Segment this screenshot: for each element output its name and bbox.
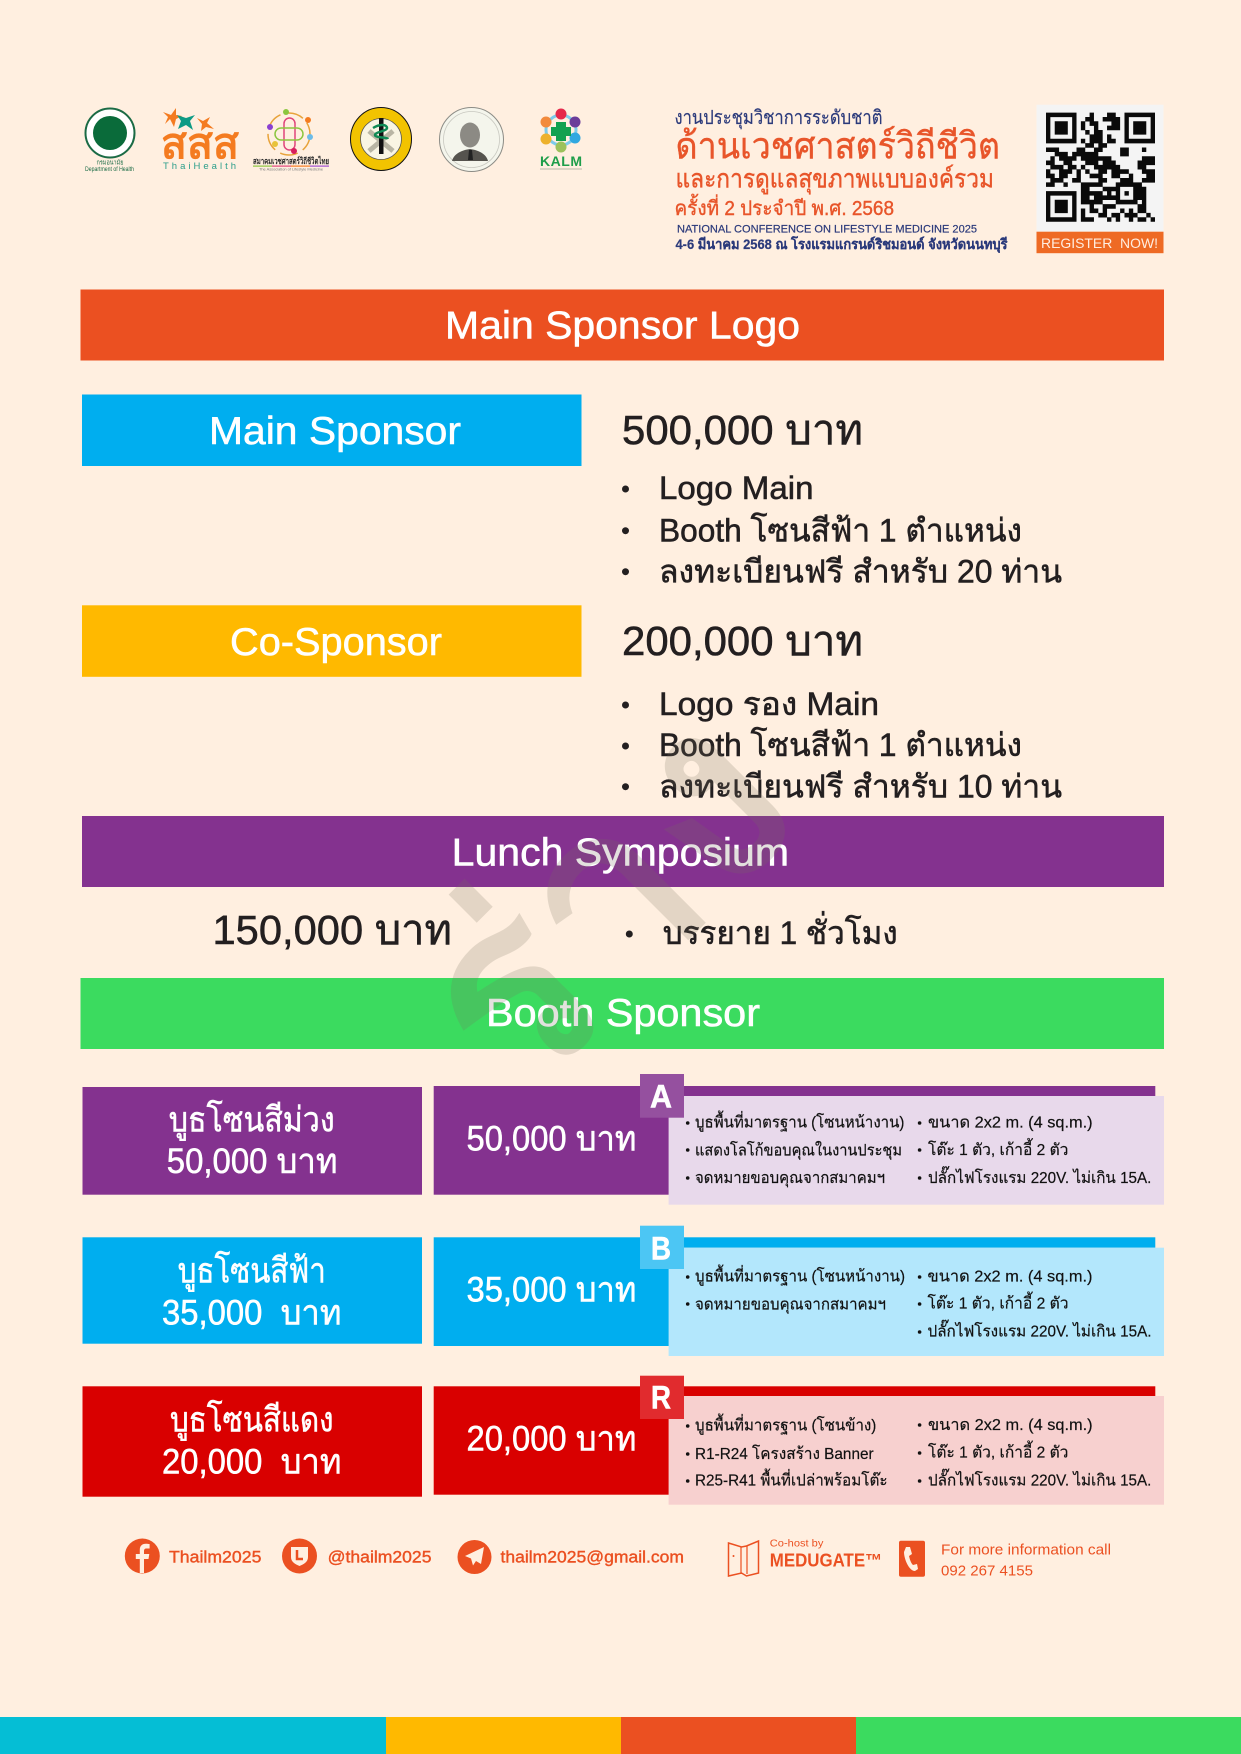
conference title block: NATIONAL CONFERENCE ON LIFESTYLE MEDICINE 2025 (677, 224, 977, 236)
zone label: 50,000 บาท (167, 1142, 338, 1181)
benefits list: ลงทะเบียนฟรี สำหรับ 20 ท่าน (659, 554, 1062, 590)
footer: Medugate co-host: Co-host by (770, 1538, 824, 1550)
footer: phone information: 092 267 4155 (941, 1563, 1033, 1580)
bottom colour strip (0, 1717, 1241, 1754)
logo: portrait medal (440, 108, 504, 172)
panel: Lunch Symposium (82, 816, 1164, 953)
logo: association of lifestyle medicine (253, 109, 329, 172)
booth row: purple zone A (82, 1074, 1164, 1205)
price: 200,000 บาท (622, 618, 863, 664)
logo: association of lifestyle medicine: The Association of Lifestyle Medicine (259, 166, 324, 172)
panel: Main Sponsor (82, 394, 1062, 590)
heading bar: Lunch Symposium: Lunch Symposium (452, 832, 789, 875)
heading bar: Booth Sponsor (80, 978, 1164, 1049)
logo: KALM (540, 108, 582, 170)
QR code with register button (1036, 105, 1164, 253)
badge B (640, 1226, 684, 1269)
conference title block (674, 107, 1008, 253)
badge A: A (650, 1079, 672, 1115)
detail panel (669, 1396, 1164, 1505)
price: 150,000 บาท (212, 907, 452, 953)
heading bar: Lunch Symposium (82, 816, 1164, 887)
label: Co-Sponsor: Co-Sponsor (230, 621, 442, 664)
footer: Facebook contact: Thailm2025 (169, 1548, 261, 1567)
zone label (82, 1386, 422, 1497)
detail panel (669, 1248, 1164, 1356)
benefits list: Booth โซนสีฟ้า 1 ตำแหน่ง (659, 513, 1022, 549)
footer: email contact: thailm2025@gmail.com (500, 1548, 684, 1567)
footer: Medugate co-host (728, 1538, 882, 1576)
conference title block: และการดูแลสุขภาพแบบองค์รวม (676, 163, 994, 194)
heading bar: Main Sponsor Logo: Main Sponsor Logo (445, 305, 800, 348)
detail panel: ขนาด 2x2 m. (4 sq.m.) (928, 1115, 1093, 1132)
footer: LINE contact: @thailm2025 (328, 1548, 432, 1567)
detail panel: แสดงโลโก้ขอบคุณในงานประชุม (695, 1140, 902, 1160)
top accent (668, 1086, 1155, 1096)
detail panel: ปลั๊กไฟโรงแรม 220V. ไม่เกิน 15A. (928, 1320, 1152, 1341)
logo: department of health: Department of Health (85, 166, 134, 173)
logo: ThaiHealth: สสส (161, 120, 239, 167)
zone label: บูธโซนสีฟ้า (178, 1251, 326, 1292)
panel: Co-Sponsor (82, 605, 1062, 804)
label: Main Sponsor (82, 394, 582, 466)
watermark: ร่าง (359, 655, 845, 1141)
zone label (82, 1237, 422, 1344)
zone label: 20,000 บาท (162, 1442, 342, 1481)
detail panel: ปลั๊กไฟโรงแรม 220V. ไม่เกิน 15A. (928, 1166, 1151, 1187)
benefits list: ลงทะเบียนฟรี สำหรับ 10 ท่าน (659, 768, 1062, 804)
footer: phone information (899, 1541, 1111, 1580)
register now button: REGISTER NOW! (1041, 235, 1158, 251)
top accent (668, 1386, 1155, 1396)
benefits list (622, 470, 1062, 590)
detail panel: ขนาด 2x2 m. (4 sq.m.) (928, 1417, 1093, 1434)
detail panel: โต๊ะ 1 ตัว, เก้าอี้ 2 ตัว (928, 1292, 1068, 1313)
conference title block: งานประชุมวิชาการระดับชาติ (674, 107, 882, 130)
detail panel: ขนาด 2x2 m. (4 sq.m.) (928, 1269, 1092, 1286)
footer: email contact (458, 1540, 684, 1574)
logo: yellow seal (350, 108, 412, 170)
logo: association of lifestyle medicine: สมาคมเวชศาสตร์วิถีชีวิตไทย (253, 155, 329, 166)
zone label: 35,000 บาท (162, 1293, 342, 1332)
logo: KALM: KALM (540, 153, 582, 169)
badge R: R (651, 1379, 671, 1415)
badge A (640, 1074, 684, 1118)
footer: Facebook contact (125, 1538, 261, 1574)
footer: LINE contact (282, 1538, 432, 1574)
detail panel: จดหมายขอบคุณจากสมาคมฯ (695, 1296, 886, 1314)
label: Main Sponsor: Main Sponsor (209, 410, 461, 453)
zone label: บูธโซนสีม่วง (169, 1100, 335, 1141)
detail panel: บูธพื้นที่มาตรฐาน (โซนข้าง) (695, 1414, 876, 1436)
benefits list: Booth โซนสีฟ้า 1 ตำแหน่ง (659, 727, 1022, 763)
heading bar: Booth Sponsor: Booth Sponsor (486, 992, 760, 1035)
badge B: B (651, 1230, 671, 1266)
zone label: บูธโซนสีแดง (170, 1400, 334, 1441)
price tab: 20,000 บาท (466, 1420, 636, 1459)
conference title block: ครั้งที่ 2 ประจำปี พ.ศ. 2568 (674, 194, 894, 220)
benefits list (622, 686, 1062, 804)
footer: Medugate co-host: MEDUGATE™ (770, 1551, 882, 1571)
price tab: 35,000 บาท (466, 1271, 636, 1310)
detail panel: บูธพื้นที่มาตรฐาน (โซนหน้างาน) (695, 1265, 905, 1287)
detail panel: R25-R41 พื้นที่เปล่าพร้อมโต๊ะ (695, 1469, 888, 1490)
conference title block: ด้านเวชศาสตร์วิถีชีวิต (676, 125, 1000, 166)
detail panel: ปลั๊กไฟโรงแรม 220V. ไม่เกิน 15A. (928, 1469, 1151, 1490)
detail panel: R1-R24 โครงสร้าง Banner (695, 1444, 874, 1463)
booth row: blue zone B (82, 1226, 1164, 1356)
price tab (434, 1386, 669, 1495)
benefit: บรรยาย 1 ชั่วโมง (663, 911, 898, 951)
detail panel: จดหมายขอบคุณจากสมาคมฯ (695, 1170, 885, 1188)
footer: phone information: For more information call (941, 1541, 1111, 1558)
top accent (668, 1237, 1155, 1248)
detail panel: โต๊ะ 1 ตัว, เก้าอี้ 2 ตัว (928, 1441, 1068, 1462)
label: Co-Sponsor (82, 605, 582, 677)
benefits list: Logo Main (659, 470, 814, 506)
benefits list: Logo รอง Main (659, 686, 879, 722)
booth row: red zone R (82, 1376, 1164, 1505)
logo: department of health (85, 108, 134, 173)
detail panel (669, 1096, 1164, 1205)
register now button (1036, 232, 1164, 253)
detail panel: บูธพื้นที่มาตรฐาน (โซนหน้างาน) (695, 1111, 904, 1133)
price tab: 50,000 บาท (466, 1120, 636, 1159)
detail panel: โต๊ะ 1 ตัว, เก้าอี้ 2 ตัว (928, 1138, 1068, 1159)
zone label (82, 1087, 422, 1195)
price tab (434, 1237, 669, 1346)
badge R (640, 1376, 684, 1419)
logo: ThaiHealth: ThaiHealth (163, 161, 236, 172)
conference title block: 4-6 มีนาคม 2568 ณ โรงแรมแกรนด์ริชมอนด์ จังหวัดนนทบุรี (676, 235, 1008, 253)
heading bar: Main Sponsor Logo (80, 290, 1164, 360)
price tab (434, 1086, 669, 1195)
price: 500,000 บาท (622, 407, 863, 453)
logo: department of health: กรมอนามัย (96, 158, 124, 166)
